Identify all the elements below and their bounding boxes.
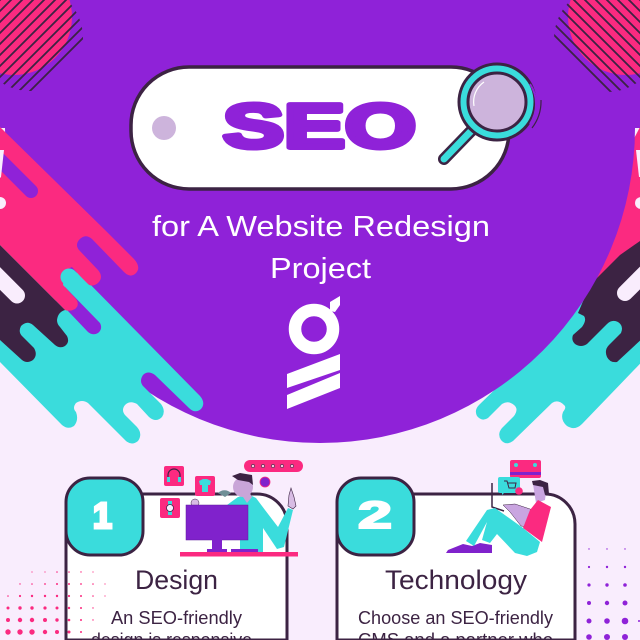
card 2 body: Choose an SEO-friendly — [358, 608, 553, 628]
card 2 body — [358, 608, 553, 640]
card 2: technology — [337, 478, 575, 640]
subtitle — [152, 211, 490, 285]
right paint streaks — [476, 127, 640, 443]
rating pill — [244, 460, 303, 472]
purple header circle — [0, 0, 640, 443]
torso — [523, 500, 551, 542]
logo — [287, 296, 340, 409]
card 2 badge: 2 — [358, 495, 392, 537]
illustration: person with laptop — [446, 460, 551, 556]
decorative corner circle left — [0, 0, 83, 91]
icon: wifi — [218, 490, 231, 497]
arm and head — [503, 484, 547, 527]
card 1 body — [91, 608, 257, 640]
icon: magnifying glass — [444, 64, 541, 159]
card 1 badge — [66, 478, 143, 555]
icon: t-shirt — [195, 476, 215, 496]
icon: watch — [160, 498, 180, 518]
card 1: design — [66, 478, 287, 640]
monitor — [186, 505, 258, 552]
card 1 body: An SEO-friendly — [111, 608, 242, 628]
laptop — [492, 483, 504, 511]
icon: fruit — [260, 477, 270, 487]
card 2 title: Technology — [385, 565, 528, 595]
chat bubble with cart — [498, 477, 523, 495]
person — [191, 473, 296, 552]
desk — [180, 552, 298, 556]
card 1 badge: 1 — [93, 495, 112, 536]
illustration: designer at monitor — [160, 460, 303, 556]
hair — [532, 480, 549, 495]
decorative corner circle right — [554, 0, 640, 92]
halftone dots right — [586, 548, 640, 640]
pill hole — [152, 116, 176, 140]
heading: SEO: SEO — [223, 92, 416, 162]
title pill — [131, 67, 509, 189]
subtitle: for A Website Redesign — [152, 211, 490, 243]
credit card — [510, 460, 541, 478]
subtitle: Project — [270, 253, 371, 285]
left paint streaks — [0, 127, 203, 444]
card 2 badge — [337, 478, 414, 555]
shoes — [446, 543, 492, 553]
legs — [466, 508, 540, 556]
halftone dots left — [5, 571, 106, 635]
card 1 title: Design — [135, 565, 218, 595]
icon: headphones — [164, 466, 184, 486]
